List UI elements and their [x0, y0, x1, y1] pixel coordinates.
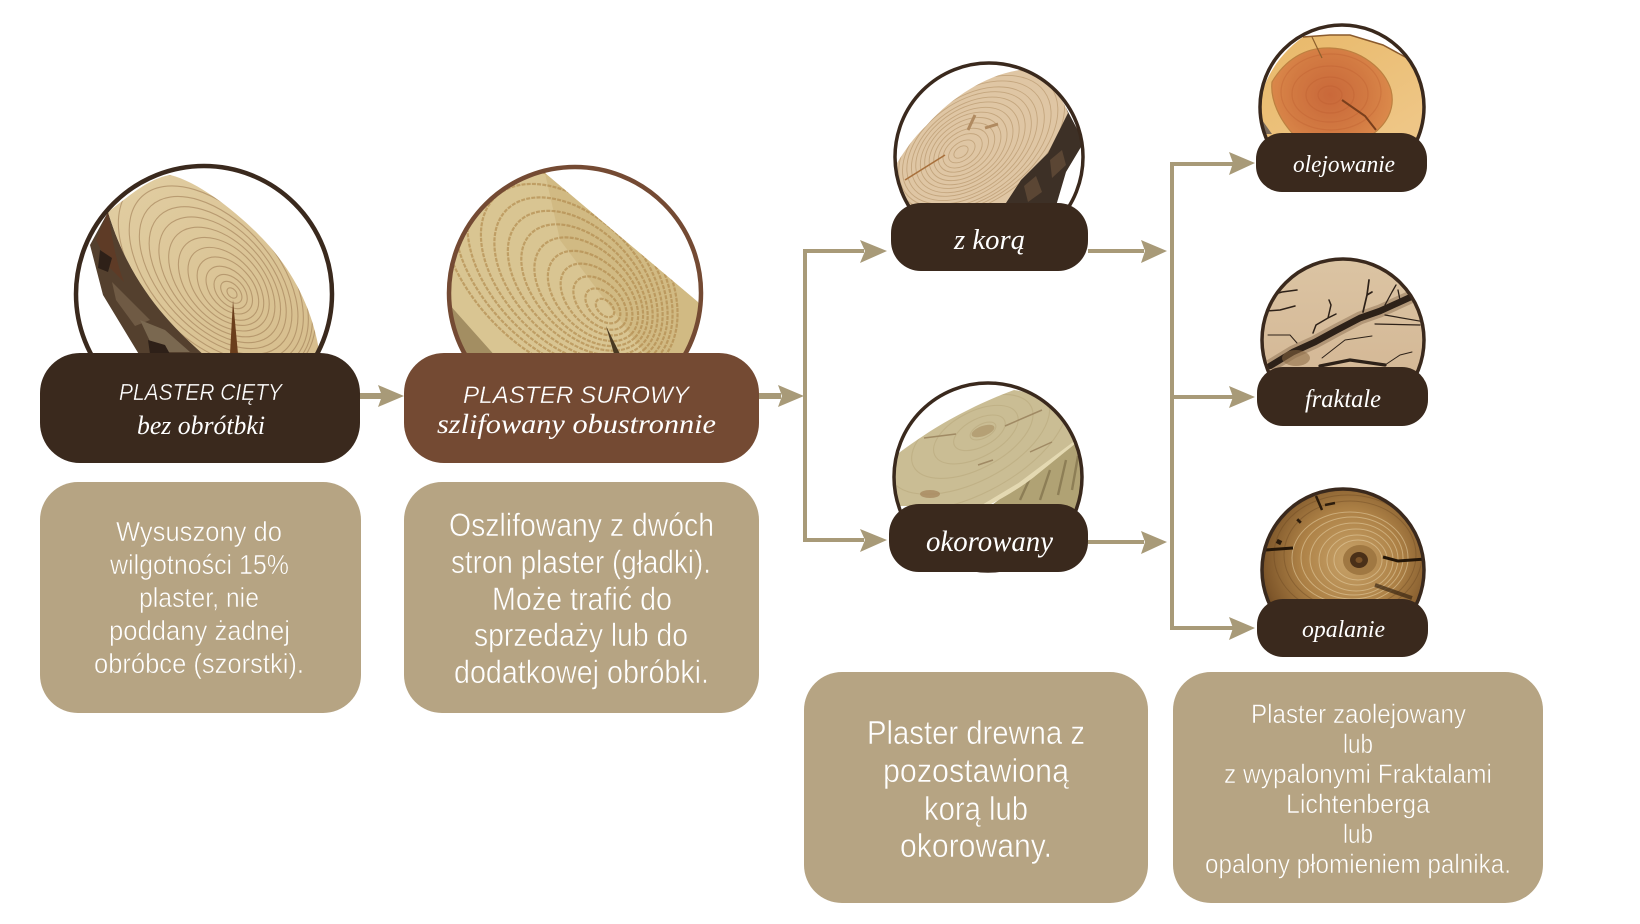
label pill: plaster cięty	[40, 353, 360, 463]
label pill: okorowany: okorowany	[926, 525, 1054, 558]
text block: opis wykończeń: lub	[1343, 729, 1373, 759]
label pill: olejowanie: olejowanie	[1293, 152, 1395, 178]
label pill: plaster cięty: bez obrótbki	[137, 411, 265, 440]
text block: opis kory: Plaster drewna z	[867, 714, 1085, 751]
text block: opis wykończeń: z wypalonymi Fraktalami	[1224, 759, 1492, 789]
label pill: fraktale	[1257, 367, 1428, 426]
text block: opis plastra ciętego: wilgotności 15%	[109, 549, 289, 580]
photo: sanded slice	[446, 164, 704, 353]
text block: opis wykończeń	[1173, 672, 1543, 903]
label pill: plaster surowy: PLASTER SUROWY	[463, 382, 691, 409]
text block: opis wykończeń: opalony płomieniem palnika.	[1205, 849, 1511, 879]
label pill: plaster cięty: PLASTER CIĘTY	[119, 379, 284, 405]
text block: opis plastra ciętego	[40, 482, 361, 713]
text block: opis plastra surowego: sprzedaży lub do	[474, 617, 688, 653]
panel: fraktale	[1255, 250, 1435, 426]
text block: opis plastra surowego	[404, 482, 759, 713]
panel: okorowany	[889, 381, 1088, 573]
text block: opis wykończeń: Lichtenberga	[1286, 789, 1431, 819]
text block: opis plastra ciętego: Wysuszony do	[116, 516, 282, 547]
panel: olejowanie	[1256, 25, 1430, 192]
label pill: okorowany	[889, 504, 1088, 572]
text block: opis plastra surowego: dodatkowej obróbki.	[454, 654, 709, 690]
arrow: treatment bracket to three finishes	[1170, 152, 1255, 640]
text block: opis plastra ciętego: poddany żadnej	[109, 615, 290, 646]
label pill: z korą: z korą	[953, 225, 1025, 256]
panel: plaster cięty	[40, 164, 360, 463]
panel: opalanie	[1255, 485, 1435, 657]
text block: opis kory: korą lub	[924, 790, 1028, 827]
panel: z korą	[891, 61, 1088, 271]
label pill: fraktale: fraktale	[1305, 386, 1381, 413]
panel: plaster surowy	[404, 164, 759, 463]
text block: opis kory: okorowany.	[900, 827, 1052, 864]
label pill: z korą	[891, 203, 1088, 271]
arrow: plaster cięty to plaster surowy	[360, 385, 404, 407]
text block: opis wykończeń: lub	[1343, 819, 1373, 849]
label pill: opalanie: opalanie	[1302, 617, 1385, 643]
arrow: okorowany to treatments	[1088, 531, 1167, 554]
photo: flame-charred slice	[1260, 487, 1426, 604]
text block: opis plastra surowego: Oszlifowany z dwóch	[449, 507, 714, 543]
text block: opis wykończeń: Plaster zaolejowany	[1251, 699, 1466, 729]
photo: Lichtenberg fractal burn	[1260, 257, 1426, 374]
label pill: opalanie	[1257, 599, 1428, 657]
text block: opis plastra surowego: stron plaster (gładki).	[451, 544, 711, 580]
text block: opis plastra ciętego: obróbce (szorstki).	[94, 648, 304, 679]
arrow: plaster surowy to bracket	[759, 385, 804, 407]
photo: debarked slice	[892, 381, 1084, 573]
photo: cut slice with bark	[74, 164, 334, 353]
text block: opis plastra ciętego: plaster, nie	[139, 582, 259, 613]
photo: oiled slice	[1258, 23, 1426, 140]
text block: opis kory	[804, 672, 1148, 903]
label pill: plaster surowy: szlifowany obustronnie	[437, 409, 716, 439]
arrow: z korą to treatments	[1088, 240, 1167, 263]
label pill: olejowanie	[1256, 133, 1427, 192]
text block: opis plastra surowego: Może trafić do	[492, 581, 672, 617]
label pill: plaster surowy	[404, 353, 759, 463]
arrow: branching bracket to z korą and okorowany	[803, 240, 887, 552]
text block: opis kory: pozostawioną	[883, 752, 1070, 789]
photo: slice with bark	[893, 61, 1085, 206]
